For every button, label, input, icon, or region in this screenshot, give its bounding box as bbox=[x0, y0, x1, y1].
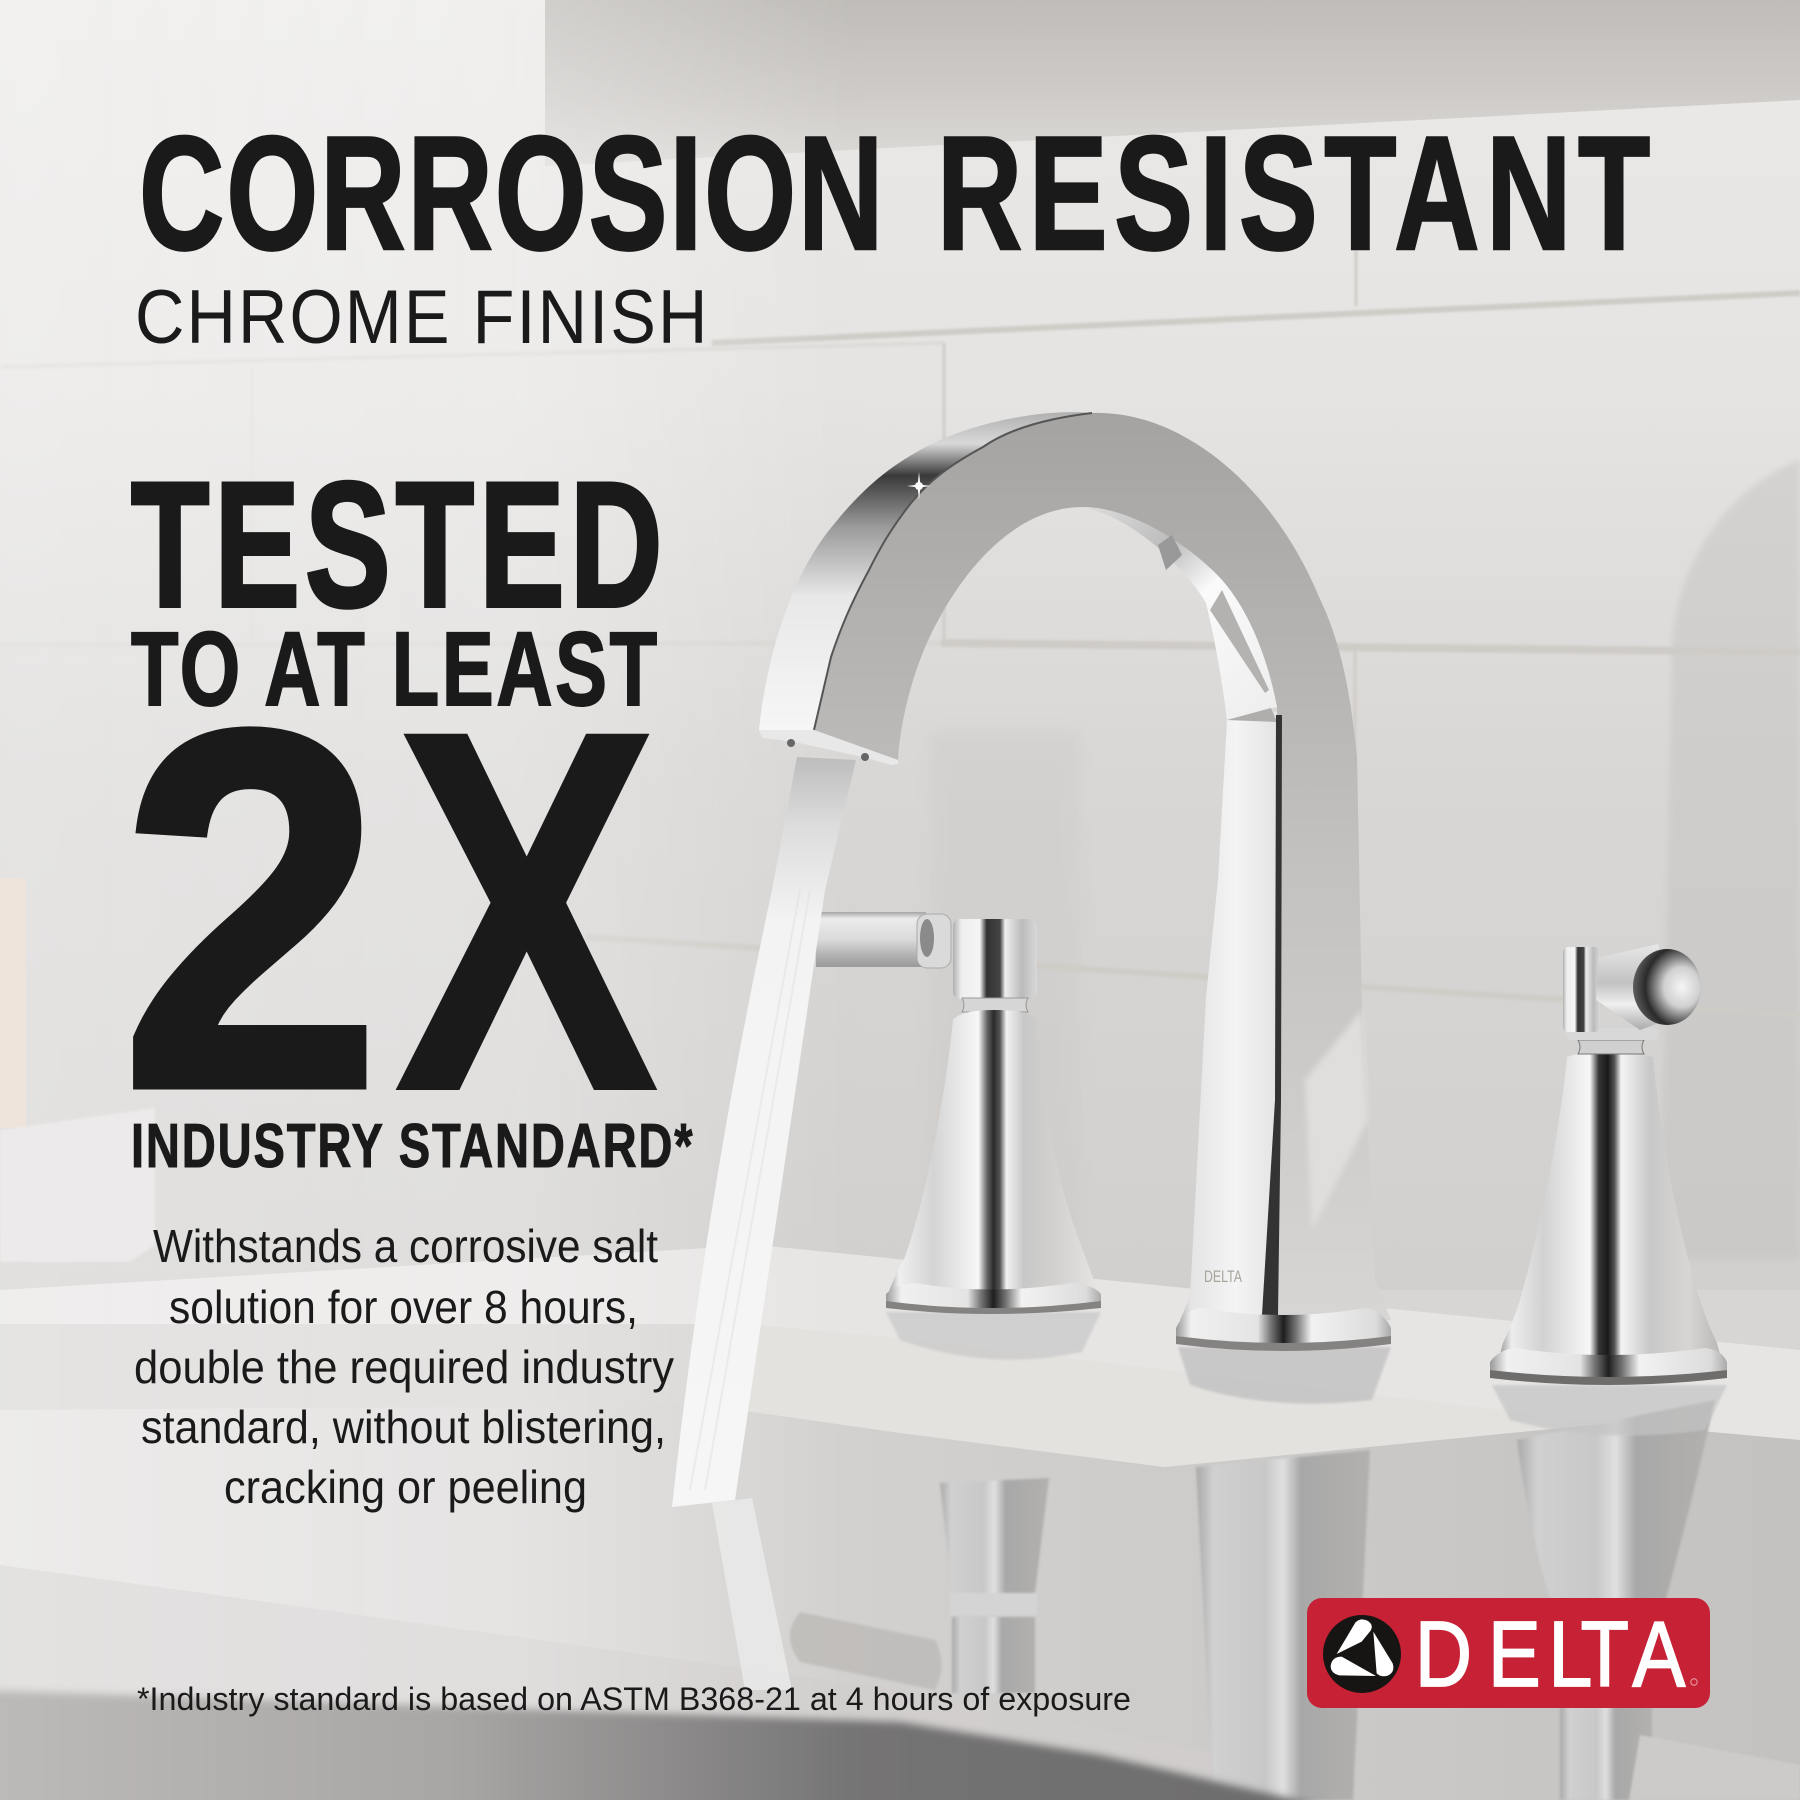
base reflections on the deck bbox=[886, 1312, 1727, 1436]
Delta logo bbox=[1307, 1598, 1710, 1708]
DELTA mark on stem: DELTA bbox=[1204, 1267, 1242, 1286]
left handle bbox=[816, 912, 1101, 1314]
spout and stem bbox=[759, 412, 1391, 1351]
faucet reflections in the counter bbox=[790, 1400, 1800, 1800]
industry standard: INDUSTRY STANDARD* bbox=[131, 1111, 693, 1181]
heading: corrosion resistant: RESISTANT bbox=[937, 104, 1657, 284]
dark foreground counter edge bbox=[0, 1690, 1340, 1800]
letter X: X bbox=[395, 624, 660, 1197]
right handle bbox=[1490, 944, 1727, 1385]
description text: Withstands a corrosive salt bbox=[153, 1220, 658, 1272]
tested: TESTED bbox=[131, 445, 662, 644]
white quartz deck front edge bbox=[746, 1324, 1612, 1467]
to at least: TO AT LEAST bbox=[131, 610, 657, 728]
water stream bbox=[672, 757, 856, 1690]
numeral 2: 2 bbox=[120, 625, 382, 1195]
claim: tested to at least 2x bbox=[120, 445, 693, 1197]
heading: corrosion resistant: CORROSION bbox=[139, 104, 885, 284]
footnote: *Industry standard is based on ASTM B368-21 at 4 hours of exposure bbox=[137, 1681, 1131, 1717]
wordmark: DELTA bbox=[1415, 1603, 1686, 1706]
chrome faucet bbox=[759, 412, 1727, 1436]
subheading: chrome finish: CHROME FINISH bbox=[135, 276, 707, 360]
description text: solution for over 8 hours, bbox=[169, 1281, 638, 1333]
description text bbox=[134, 1220, 674, 1513]
description text: cracking or peeling bbox=[224, 1461, 587, 1513]
description text: standard, without blistering, bbox=[141, 1401, 666, 1453]
description text: double the required industry bbox=[134, 1341, 674, 1393]
